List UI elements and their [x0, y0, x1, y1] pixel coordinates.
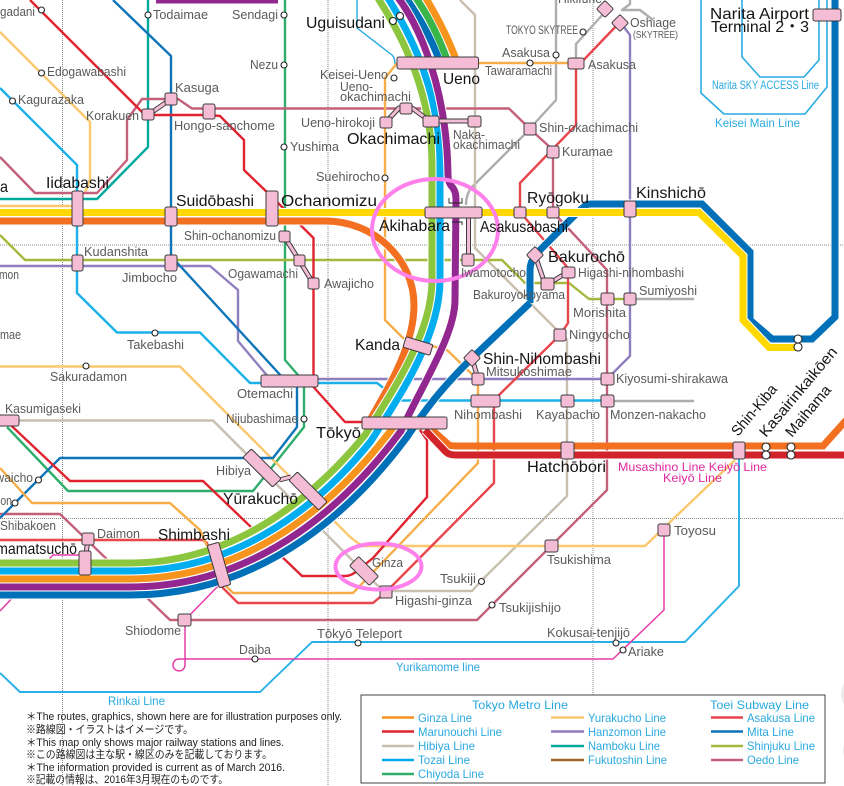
airport access lines [357, 0, 827, 114]
small station labels: Monzen-nakacho [610, 408, 706, 422]
small station labels: Hibiya [216, 464, 251, 478]
major station labels: Tōkyō [316, 425, 361, 442]
small station labels: Kasuga [175, 81, 219, 95]
thick JR lines east and west [0, 0, 844, 455]
major station labels: Okachimachi [347, 131, 440, 148]
major station labels: Narita Airport [710, 6, 810, 23]
Asakusa Line [0, 22, 620, 603]
small station labels: Tsukiji [440, 572, 476, 586]
small station labels: Edogawabashi [47, 65, 126, 79]
line name labels: Narita SKY ACCESS Line [712, 80, 819, 92]
Chuo orange line [0, 221, 414, 420]
Ginza coloured top segment [424, 0, 457, 62]
small station labels: Bakuroyokoyama [473, 288, 565, 302]
small station labels: Higashi-nihombashi [578, 266, 684, 280]
edge shapes [841, 675, 844, 767]
small station labels: Asakusa [588, 58, 636, 72]
legend column 1 swatches [382, 718, 414, 774]
Yamanote green line [0, 0, 432, 563]
legend column 1 labels: Chiyoda Line [418, 767, 484, 781]
Namboku Line [0, 0, 148, 199]
disclaimer notes [26, 711, 342, 786]
line name labels: Keisei Main Line [715, 116, 800, 130]
Ginza coloured lower line [0, 425, 395, 579]
small station labels: Naka- [453, 128, 485, 142]
disclaimer notes: ＊This map only shows major railway stations and lines. [26, 737, 284, 749]
small station labels: Ariake [628, 645, 664, 659]
small station labels: Iwamotocho [461, 266, 526, 280]
major station labels: Uguisudani [306, 15, 385, 32]
small station labels: Yushima [290, 140, 339, 154]
small station labels: Jimbocho [122, 271, 177, 285]
disclaimer notes: ＊The information provided is current as of March 2016. [26, 762, 285, 774]
line name labels: Keiyō Line [663, 471, 722, 485]
small station labels: Shibakoen [0, 519, 56, 533]
Keiyo red line [425, 430, 844, 455]
line name labels [108, 80, 819, 708]
legend column 1 labels: Marunouchi Line [418, 725, 502, 739]
small station labels: okachimachi [340, 90, 411, 104]
disclaimer notes: ※路線図・イラストはイメージです。 [26, 723, 193, 736]
Keisei line to Ueno [357, 0, 395, 64]
major station labels: Iidabashi [46, 175, 109, 192]
central rail ring [0, 0, 530, 595]
small station labels: Ueno- [340, 80, 373, 94]
legend column 2 labels: Namboku Line [588, 739, 660, 753]
small station labels: Kiyosumi-shirakawa [616, 372, 728, 386]
Akihabara small brackets [449, 198, 462, 225]
legend column 3 labels [747, 711, 815, 767]
major station labels: Akihabara [379, 218, 450, 235]
small station labels: Ogawamachi [228, 267, 298, 281]
small station labels: Oshiage [630, 16, 676, 30]
Sobu rapid blue line [530, 0, 835, 339]
Keihin-Tohoku cyan line [0, 0, 440, 571]
major station labels: Kanda [355, 337, 400, 354]
small station labels: Takebashi [127, 338, 184, 352]
green top segment [414, 0, 448, 62]
header banner fragment [156, 0, 278, 4]
legend heading: Toei Subway: Toei Subway Line [710, 698, 809, 712]
legend column 2 labels: Hanzomon Line [588, 725, 666, 739]
small station labels: Sumiyoshi [639, 284, 697, 298]
small station labels: Toyosu [674, 524, 716, 538]
small station labels: Shiodome [125, 624, 181, 638]
small station labels: Hongo-sanchome [174, 119, 275, 133]
legend column 2 labels [588, 711, 667, 767]
station connectors [85, 99, 568, 562]
small station labels: Tsukishima [547, 553, 611, 567]
small station labels: Kagurazaka [18, 93, 84, 107]
small station labels: Todaimae [153, 8, 208, 22]
major station labels: Maihama [782, 382, 835, 441]
subway lines [0, 0, 739, 692]
Rinkai Line [0, 450, 739, 692]
blue lower line [0, 303, 530, 595]
legend column 1 labels: Ginza Line [418, 711, 472, 725]
small station labels: Shin-okachimachi [539, 121, 638, 135]
legend column 1 labels: Tozai Line [418, 753, 470, 767]
small station labels: Nezu [250, 58, 278, 72]
small station labels: TOKYO SKYTREE [506, 25, 578, 37]
small station labels: Kayabacho [536, 408, 600, 422]
disclaimer notes: ＊The routes, graphics, shown here are for illustration purposes only. [26, 711, 342, 723]
small station labels: Kuramae [562, 145, 613, 159]
legend column 3 labels: Asakusa Line [747, 711, 815, 725]
disclaimer notes: ※この路線図は主な駅・線区のみを記載しております。 [26, 748, 272, 761]
small station labels: Nijubashimae [226, 412, 298, 426]
small station labels: Ginza [372, 556, 403, 570]
small station labels: okachimachi [453, 138, 520, 152]
major station labels: Hatchōbori [527, 459, 606, 476]
small station labels: Kudanshita [84, 245, 148, 259]
legend column 3 labels: Mita Line [747, 725, 794, 739]
legend column 2 swatches [551, 718, 584, 760]
station markers [0, 1, 841, 626]
major station labels: a [0, 179, 8, 196]
small station labels: Suehirocho [316, 170, 380, 184]
Sumiyoshi extension [607, 299, 694, 401]
line name labels: Musashino Line Keiyō Line [618, 460, 767, 474]
major station labels: Ochanomizu [281, 193, 377, 210]
blue top segment [404, 0, 440, 62]
legend column 3 labels: Shinjuku Line [747, 739, 815, 753]
legend column 3 labels: Oedo Line [747, 753, 799, 767]
Shinjuku Line [0, 235, 630, 299]
small station labels: Sendagi [232, 8, 278, 22]
legend column 2 labels: Yurakucho Line [588, 711, 666, 725]
line name labels: Yurikamome line [396, 660, 480, 674]
small station labels: Daiba [239, 643, 271, 657]
small station labels: (SKYTREE) [633, 29, 678, 41]
line name labels: Rinkai Line [108, 694, 165, 708]
major station labels: Shimbashi [158, 527, 230, 544]
small station labels: Asakusa [502, 46, 550, 60]
Narita Sky Access Line [742, 0, 819, 77]
major station labels: Kinshichō [636, 185, 706, 202]
small station labels: Kokusai-tenjijō [547, 626, 630, 640]
major station labels: Terminal 2・3 [711, 19, 809, 36]
small station labels: Shin-ochanomizu [184, 229, 276, 243]
small station labels: Nihombashi [454, 408, 522, 422]
purple line [0, 0, 456, 587]
major station labels: Shin-Nihombashi [483, 351, 601, 368]
small station circles [10, 7, 802, 662]
Tsukuba Express [466, 0, 556, 205]
small station labels: Tōkyō Teleport [317, 627, 403, 641]
major station labels [0, 6, 841, 558]
Yurikamome Line [0, 530, 664, 671]
small station labels: Ningyocho [569, 328, 630, 342]
small station labels: Korakuen [86, 109, 139, 123]
highlight oval: Ginza [336, 544, 422, 590]
Sobu yellow line [0, 212, 798, 348]
small station labels: Higashi-ginza [395, 594, 472, 608]
small station labels: Keisei-Ueno [320, 68, 388, 82]
Mita Line [0, 0, 297, 518]
Keiyo and Musashino orange line [430, 416, 844, 446]
major station labels: Bakurochō [548, 249, 625, 266]
Marunouchi Line [0, 0, 427, 576]
major station labels: Ueno [443, 71, 480, 88]
small station labels [0, 0, 728, 659]
small station labels: Otemachi [237, 387, 293, 401]
legend column 2 labels: Fukutoshin Line [588, 753, 667, 767]
major station labels: Yūrakuchō [223, 491, 298, 508]
disclaimer notes: ※記載の情報は、2016年3月現在のものです。 [26, 772, 228, 786]
Hanzomon Line [0, 22, 630, 379]
Tobu and Skytree line [576, 0, 653, 60]
Ginza Line [0, 62, 576, 593]
major station labels: Kasairinkaikōen [756, 344, 841, 441]
major station labels: Ryōgoku [527, 190, 589, 207]
major station labels: Suidōbashi [176, 193, 254, 210]
legend column 3 swatches [711, 718, 743, 760]
small station labels: mae [0, 328, 21, 342]
legend column 1 labels [418, 711, 502, 781]
legend [361, 695, 825, 783]
Oedo Line [0, 99, 607, 620]
Keisei Main Line [701, 0, 827, 114]
Chiyoda Line [7, 0, 304, 491]
legend column 1 labels: Hibiya Line [418, 739, 475, 753]
small station labels: Morishita [573, 306, 626, 320]
small station labels: Sakuradamon [50, 370, 127, 384]
small station labels: Mitsukoshimae [486, 365, 572, 379]
small station labels: Awajicho [324, 277, 374, 291]
highlight oval: Akihabara [372, 179, 498, 281]
small station labels: Kasumigaseki [5, 402, 81, 416]
Tozai Line [0, 88, 607, 400]
small station labels: Tawaramachi [485, 64, 552, 78]
small station labels: Ueno-hirokoji [301, 116, 375, 130]
major station labels: Shin-Kiba [728, 381, 781, 440]
legend heading: Tokyo Metro: Tokyo Metro Line [472, 698, 568, 712]
small station labels: Daimon [97, 527, 140, 541]
Hibiya Line [0, 0, 567, 591]
small station labels: Tsukijishijo [499, 601, 561, 615]
Yurakucho Line [0, 32, 735, 546]
major station labels: Asakusabashi [480, 219, 568, 236]
